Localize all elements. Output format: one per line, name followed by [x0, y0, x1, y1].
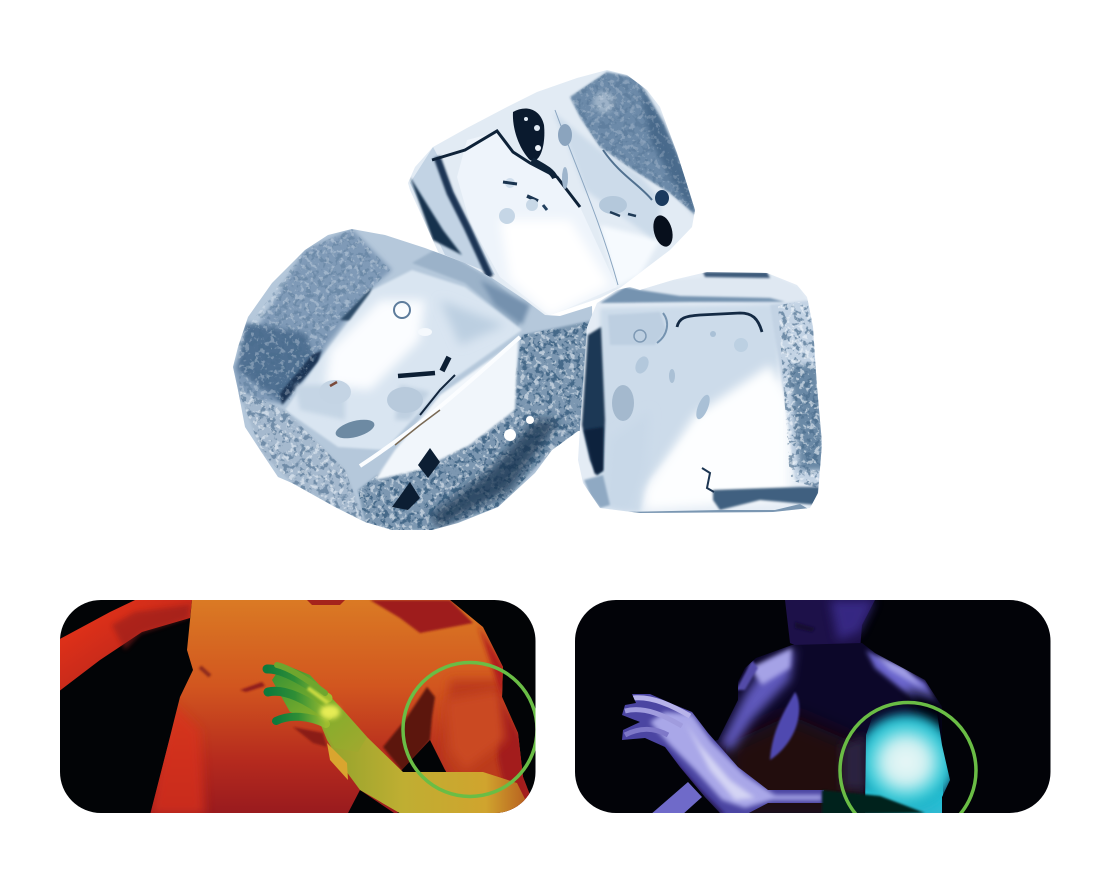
figure: head and neck [785, 600, 875, 645]
figure: forearm and hand [622, 694, 824, 813]
figure: hand [267, 664, 367, 752]
figure: torso and upper arm [145, 600, 540, 815]
ice cubes [225, 60, 830, 540]
highlight circle: warm shoulder [403, 662, 537, 796]
figure: far arm [650, 782, 702, 815]
panel: thermal image, warm body before cooling [58, 600, 540, 815]
ice cube: left [225, 220, 595, 540]
figure: raised arm [58, 600, 192, 692]
ice cube: top [400, 60, 700, 320]
cold spot glow [865, 706, 950, 813]
panel: thermal image, cold spot after ice [575, 600, 1050, 813]
figure: forearm [320, 710, 527, 815]
figure: torso [715, 643, 950, 813]
illustration: ice cubes with before and after thermal panels [60, 70, 1050, 813]
ice cube: right [578, 272, 822, 513]
cold forearm section [822, 790, 925, 815]
highlight circle: cooled shoulder [838, 700, 978, 813]
